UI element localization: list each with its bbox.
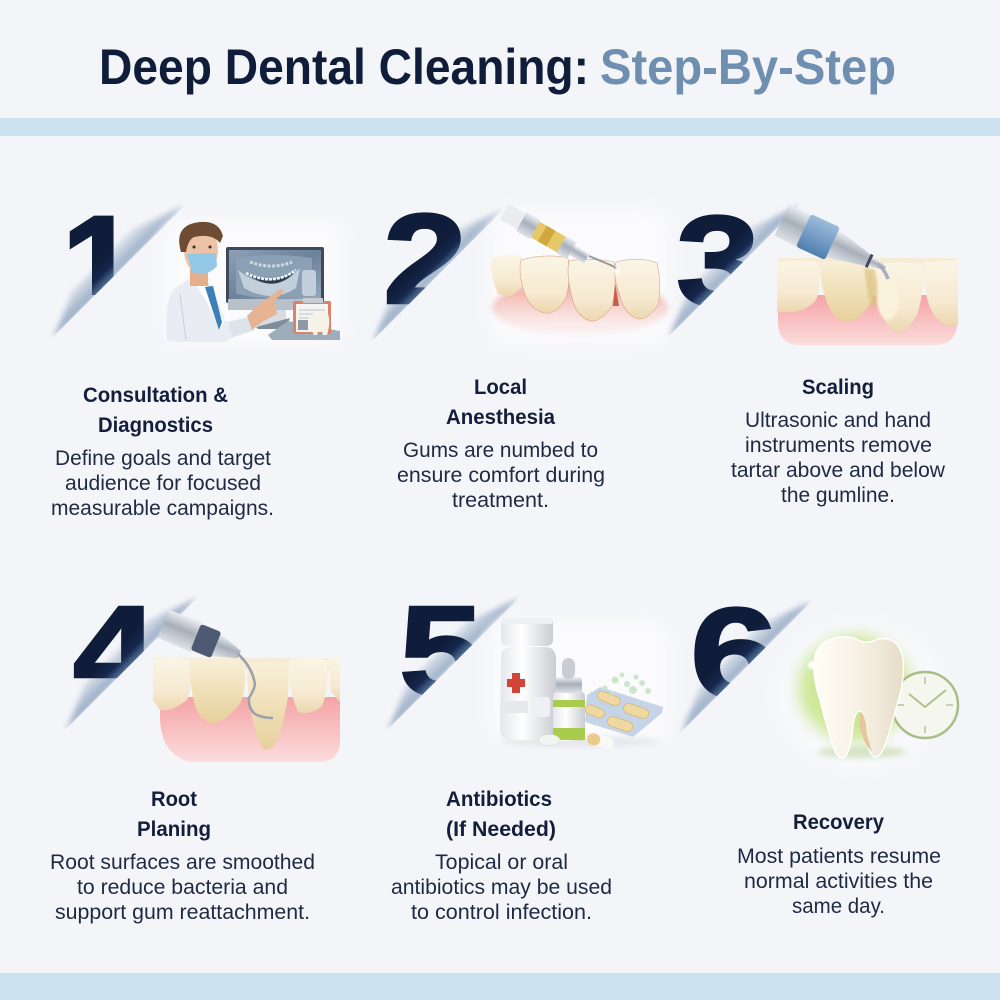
heading: Local Anesthesia: Local bbox=[474, 376, 527, 399]
heading: Root Planing: Planing bbox=[137, 818, 211, 841]
number 3 with diagonal stripe bbox=[668, 204, 799, 336]
description 6: normal activities the bbox=[744, 870, 933, 893]
description 2: ensure comfort during bbox=[397, 464, 605, 487]
description 2: Gums are numbed to bbox=[403, 439, 598, 462]
description 5 bbox=[391, 851, 612, 924]
heading: Antibiotics (If Needed): (If Needed) bbox=[446, 818, 556, 841]
description 1: Define goals and target bbox=[55, 447, 271, 470]
description 6: Most patients resume bbox=[737, 845, 941, 868]
description 5: to control infection. bbox=[411, 901, 592, 924]
number 3 with diagonal stripe: 3 bbox=[676, 190, 760, 333]
description 3: Ultrasonic and hand bbox=[745, 409, 931, 432]
step 6 panel bbox=[681, 582, 958, 918]
title: Step-By-Step bbox=[600, 39, 896, 95]
description 4: to reduce bacteria and bbox=[77, 876, 288, 899]
coat bbox=[166, 274, 255, 342]
tray bbox=[268, 321, 340, 340]
number 6 with diagonal stripe: 6 bbox=[690, 582, 778, 725]
step 5 panel bbox=[388, 580, 670, 924]
description 1: audience for focused bbox=[65, 472, 261, 495]
illustration: root planing instrument bbox=[153, 609, 340, 762]
heading: Root Planing bbox=[137, 788, 211, 841]
heading: Antibiotics (If Needed) bbox=[446, 788, 556, 841]
tooth bbox=[814, 637, 903, 758]
illustration: ultrasonic scaler on teeth bbox=[774, 204, 958, 345]
bottom band bbox=[0, 973, 1000, 1000]
description 5: antibiotics may be used bbox=[391, 876, 612, 899]
description 2 bbox=[397, 439, 605, 512]
number 4 with diagonal stripe: 4 bbox=[73, 580, 157, 723]
illustration: healthy tooth and clock bbox=[775, 620, 958, 770]
description 3: instruments remove bbox=[745, 434, 932, 457]
number 1 with diagonal stripe: 1 bbox=[62, 188, 137, 339]
green bubbles bbox=[602, 672, 651, 695]
heading: Recovery: Recovery bbox=[793, 811, 884, 834]
heading: Local Anesthesia: Anesthesia bbox=[446, 406, 555, 429]
description 6: same day. bbox=[792, 895, 885, 918]
hair bbox=[179, 222, 223, 252]
step 2 panel bbox=[373, 188, 670, 512]
description 1: measurable campaigns. bbox=[51, 497, 274, 520]
description 5: Topical or oral bbox=[435, 851, 568, 874]
blister pack bbox=[585, 687, 663, 737]
description 3: tartar above and below bbox=[731, 459, 946, 482]
illustration: medicine bottles and pills bbox=[490, 618, 670, 750]
heading: Antibiotics (If Needed): Antibiotics bbox=[446, 788, 552, 811]
tooth model bbox=[310, 312, 329, 335]
title: Deep Dental Cleaning: bbox=[99, 39, 589, 95]
number 2 with diagonal stripe: 2 bbox=[383, 188, 467, 331]
number 4 with diagonal stripe bbox=[64, 597, 196, 730]
illustration: dentist with x-ray monitor bbox=[165, 220, 343, 345]
title bbox=[99, 39, 896, 95]
heading: Consultation & Diagnostics: Diagnostics bbox=[98, 414, 213, 437]
number 2 with diagonal stripe bbox=[372, 209, 502, 340]
neck and face bbox=[190, 268, 208, 286]
description 4 bbox=[50, 851, 315, 924]
heading: Scaling: Scaling bbox=[802, 376, 874, 399]
description 6 bbox=[737, 845, 941, 918]
description 3: the gumline. bbox=[781, 484, 895, 507]
mask bbox=[187, 253, 217, 274]
description 2: treatment. bbox=[452, 489, 549, 512]
description 3 bbox=[731, 409, 946, 507]
clipboard bbox=[293, 301, 331, 334]
hand bbox=[247, 288, 284, 330]
description 4: Root surfaces are smoothed bbox=[50, 851, 315, 874]
step 3 panel bbox=[669, 190, 958, 507]
top band bbox=[0, 118, 1000, 136]
clock bbox=[892, 672, 958, 738]
heading: Consultation & Diagnostics: Consultation & bbox=[83, 384, 228, 407]
heading: Consultation & Diagnostics bbox=[83, 384, 228, 437]
number 5 with diagonal stripe: 5 bbox=[399, 580, 483, 723]
dropper bottle bbox=[553, 692, 585, 741]
heading: Local Anesthesia bbox=[446, 376, 555, 429]
description 4: support gum reattachment. bbox=[55, 901, 310, 924]
description 1 bbox=[51, 447, 274, 520]
step 1 panel bbox=[51, 188, 343, 520]
heading: Root Planing: Root bbox=[151, 788, 197, 811]
number 5 with diagonal stripe bbox=[386, 597, 518, 730]
illustration: anesthesia syringe and teeth bbox=[490, 202, 670, 346]
step 4 panel bbox=[50, 580, 340, 924]
loose pills bbox=[538, 734, 560, 746]
number 6 with diagonal stripe bbox=[680, 600, 811, 732]
number 1 with diagonal stripe bbox=[52, 205, 183, 338]
